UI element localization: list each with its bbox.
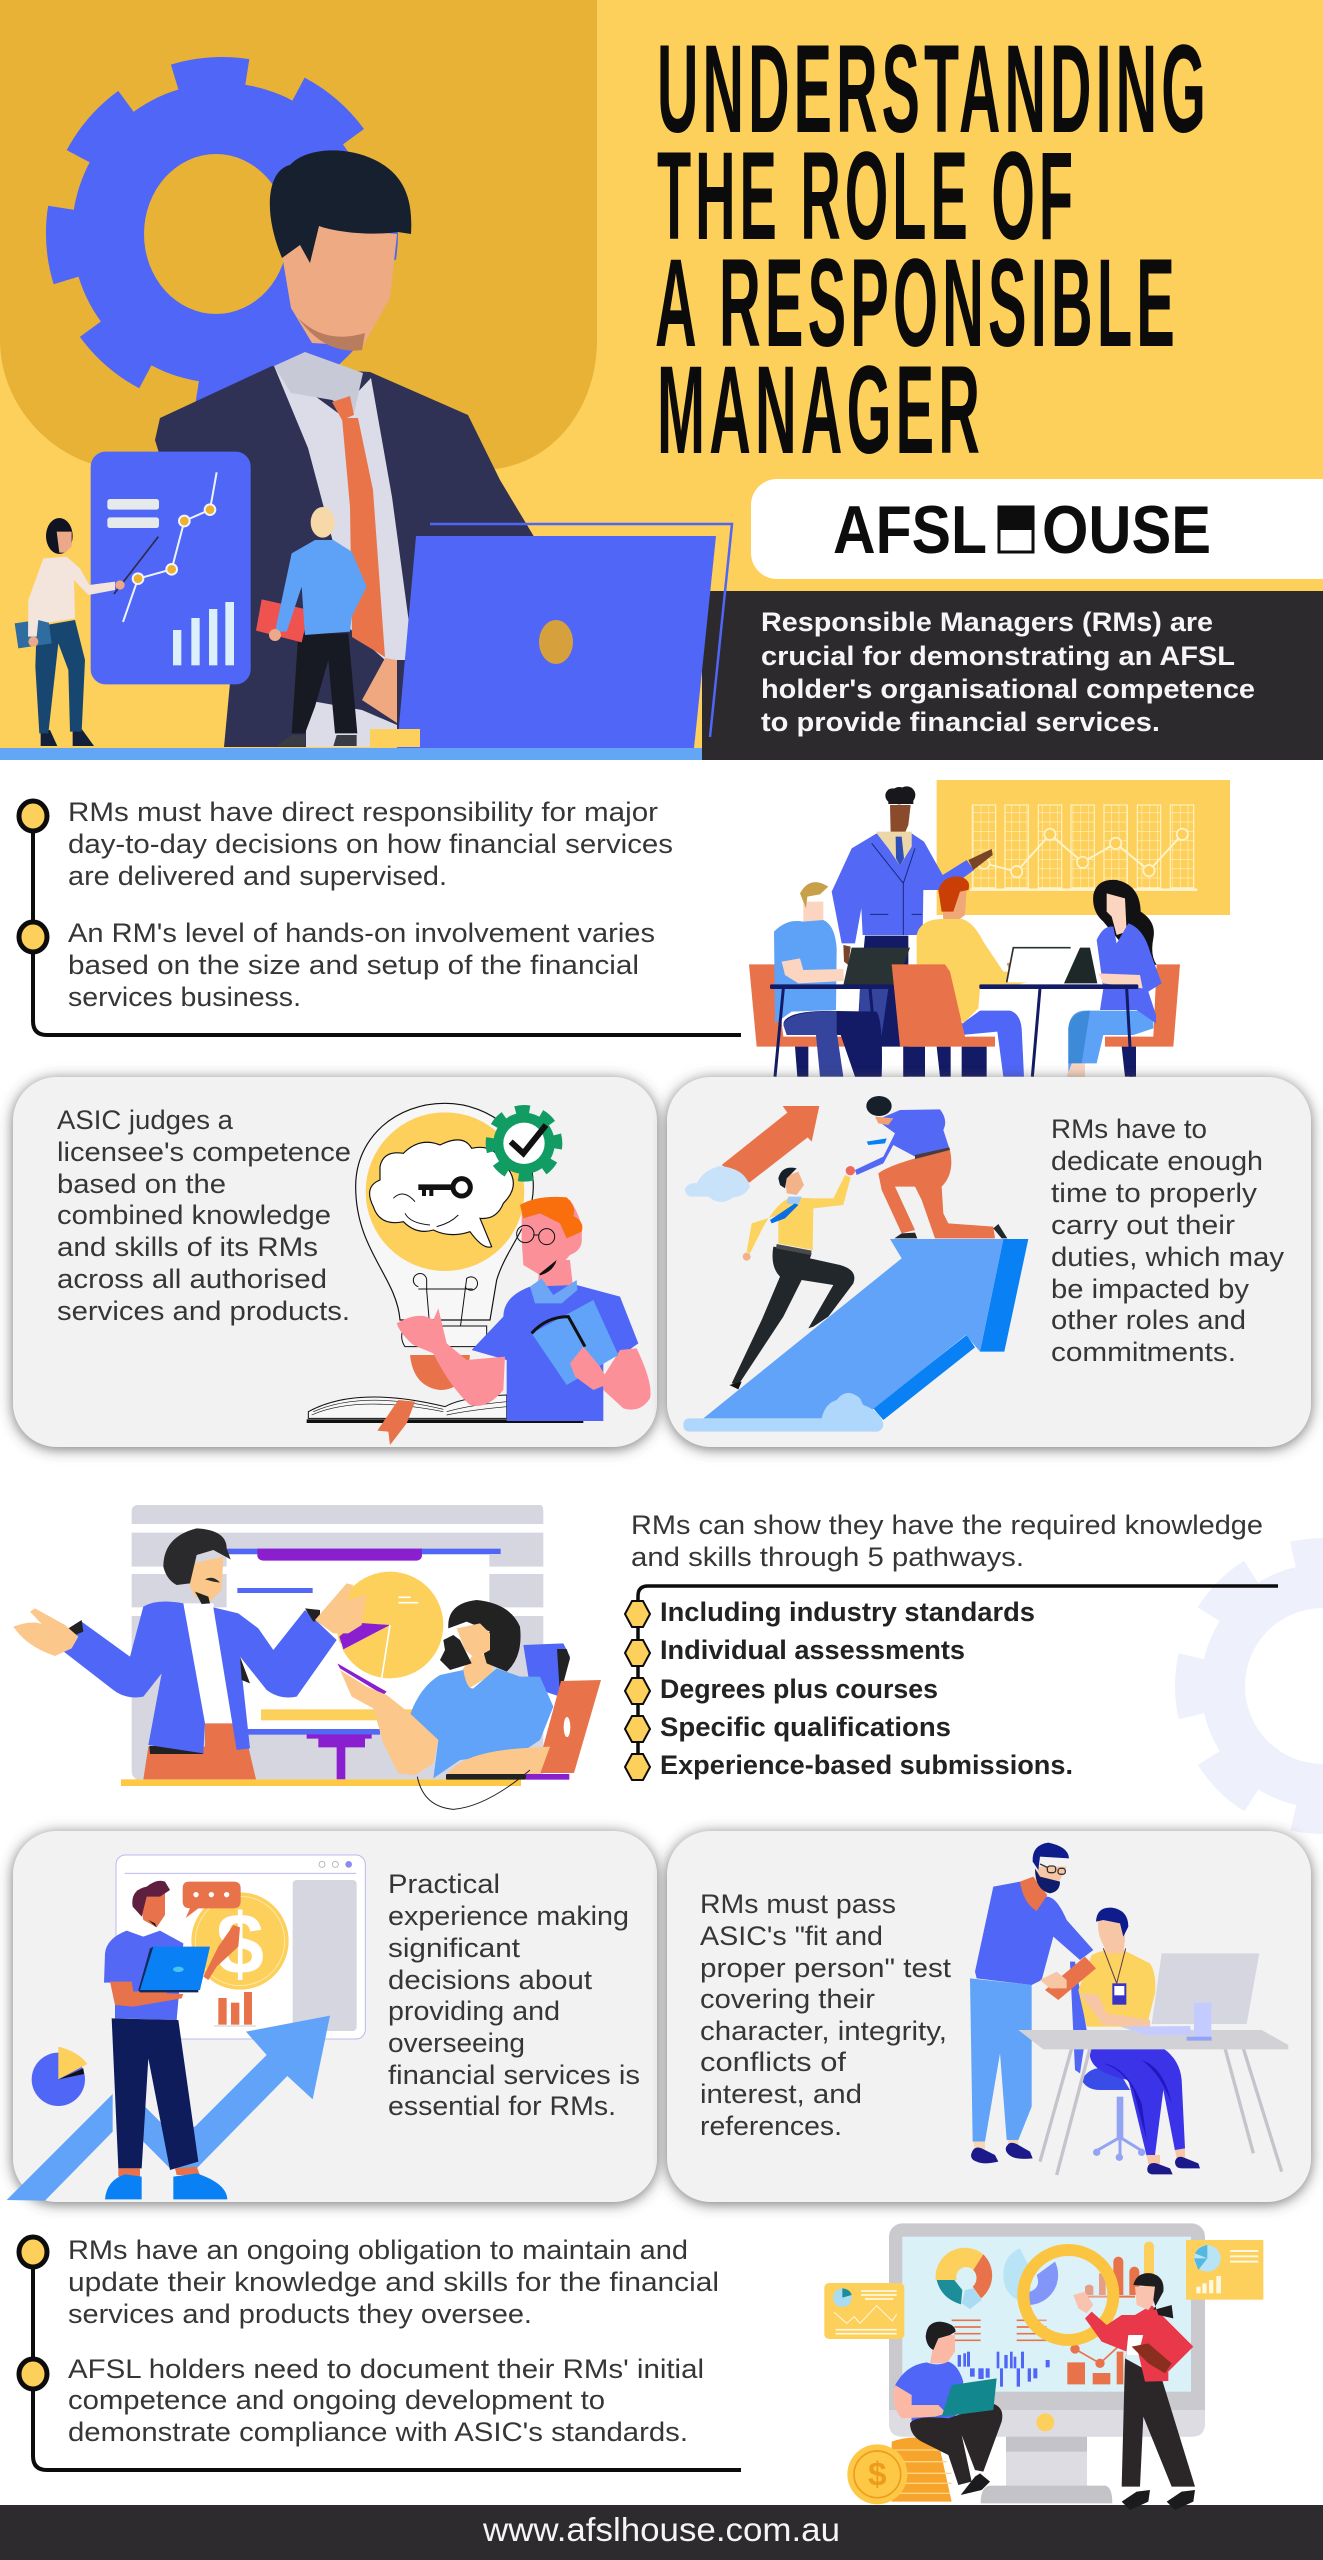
intro text: holder's organisational competence <box>761 674 1255 704</box>
timeline: last two points: update their knowledge and skills for the financial <box>68 2267 719 2297</box>
panel: dedicate time: other roles and <box>1051 1305 1246 1335</box>
pathways list: Specific qualifications <box>660 1712 951 1742</box>
desk and monitor <box>1018 1953 1288 2175</box>
angry presenter <box>13 1528 367 1779</box>
pathways list: Individual assessments <box>660 1635 965 1665</box>
blue arrow <box>7 2016 330 2201</box>
timeline: first two points <box>19 797 741 1035</box>
panel: practical experience: overseeing <box>388 2028 525 2058</box>
centre figure <box>892 876 1062 1077</box>
pathways list: Degrees plus courses <box>660 1674 938 1704</box>
panel: ASIC competence: services and products. <box>57 1296 350 1326</box>
timeline: last two points: RMs have an ongoing obligation to maintain and <box>68 2235 688 2265</box>
timeline: last two points: demonstrate compliance with ASIC's standards. <box>68 2417 688 2447</box>
reader <box>397 1197 651 1421</box>
pie <box>32 2047 87 2106</box>
timeline: last two points: services and products they oversee. <box>68 2299 532 2329</box>
panel: practical experience <box>13 1831 657 2202</box>
panel: dedicate time: be impacted by <box>1051 1274 1250 1304</box>
standing presenter <box>832 786 993 1077</box>
intro text: to provide financial services. <box>761 707 1160 737</box>
seated employee <box>1078 1908 1200 2174</box>
timeline: last two points: AFSL holders need to document their RMs' initial <box>68 2354 704 2384</box>
meeting table <box>770 984 1138 1077</box>
bottom strip <box>0 748 702 760</box>
seated man with laptop <box>893 2322 1002 2495</box>
man viewing chart <box>256 507 367 746</box>
icon: blue gear <box>6 17 438 449</box>
climber: follower <box>729 1168 854 1389</box>
panel: fit and proper person test: character, integrity, <box>700 2016 947 2046</box>
panel: dedicate time: time to properly <box>1051 1178 1258 1208</box>
illustration: mentor and employee at desk <box>970 1843 1288 2175</box>
pathways intro text <box>631 1510 1263 1572</box>
panel: ASIC competence: combined knowledge <box>57 1200 331 1230</box>
pathways list: Experience-based submissions. <box>660 1750 1073 1780</box>
chart panel and small figures <box>15 452 367 746</box>
man with tablet <box>104 1881 240 2199</box>
left chair and man <box>749 882 910 1077</box>
donut charts <box>936 2242 1154 2309</box>
pathways list: Including industry standards <box>660 1597 1035 1627</box>
header panel <box>0 0 1323 760</box>
yellow chart cards <box>824 2240 1263 2339</box>
title <box>655 20 1210 480</box>
timeline: first two points: RMs must have direct responsibility for major <box>68 797 658 827</box>
panel: ASIC competence: and skills of its RMs <box>57 1232 318 1262</box>
pale background gear <box>1162 1525 1323 1847</box>
intro text: crucial for demonstrating an AFSL <box>761 641 1235 671</box>
footer bar: www.afslhouse.com.au <box>482 2511 840 2548</box>
panel: practical experience: significant <box>388 1933 521 1963</box>
panel: ASIC competence: across all authorised <box>57 1264 327 1294</box>
panel: fit and proper person test: ASIC's "fit and <box>700 1921 883 1951</box>
illustration: team meeting <box>749 780 1230 1077</box>
panel: dedicate time <box>667 1077 1311 1447</box>
panel: fit and proper person test: proper person" test <box>700 1953 952 1983</box>
laptop <box>370 524 1323 760</box>
blue arrow <box>683 1239 1028 1432</box>
manager figure <box>155 150 536 747</box>
panel: dedicate time: RMs have to <box>1051 1114 1207 1144</box>
panel: fit and proper person test: conflicts of <box>700 2047 847 2077</box>
panel: ASIC competence: based on the <box>57 1169 226 1199</box>
data rows <box>952 2320 1047 2340</box>
pathways intro text: RMs can show they have the required knowledge <box>631 1510 1263 1540</box>
panel: practical experience: Practical <box>388 1869 500 1899</box>
coin stack <box>847 2437 952 2504</box>
logo pill: OUSE <box>1042 492 1211 568</box>
panel: practical experience: providing and <box>388 1996 560 2026</box>
logo pill <box>751 479 1323 579</box>
panel: practical experience: experience making <box>388 1901 629 1931</box>
panel: practical experience: decisions about <box>388 1965 593 1995</box>
panel: fit and proper person test: references. <box>700 2111 842 2141</box>
panel: dedicate time: commitments. <box>1051 1337 1236 1367</box>
illustration: lightbulb, brain and reader <box>307 1098 651 1445</box>
timeline: first two points: are delivered and supervised. <box>68 861 447 891</box>
intro text: Responsible Managers (RMs) are <box>761 607 1213 637</box>
panel: fit and proper person test: covering their <box>700 1984 875 2014</box>
magnifier <box>1023 2250 1143 2355</box>
timeline: last two points: competence and ongoing development to <box>68 2385 605 2415</box>
climber: helper <box>846 1096 1007 1238</box>
pathways intro text: and skills through 5 pathways. <box>631 1542 1024 1572</box>
woman presenter <box>15 518 158 746</box>
timeline: first two points: based on the size and setup of the financial <box>68 950 639 980</box>
timeline: last two points <box>19 2235 741 2470</box>
illustration: presentation <box>13 1505 601 1809</box>
panel: ASIC competence <box>13 1077 657 1447</box>
panel: practical experience: financial services is <box>388 2060 640 2090</box>
intro text <box>761 607 1255 737</box>
timeline: first two points: An RM's level of hands-on involvement varies <box>68 918 655 948</box>
logo pill: AFSL <box>833 492 987 568</box>
timeline: first two points: day-to-day decisions on how financial services <box>68 829 673 859</box>
timeline: first two points: services business. <box>68 982 301 1012</box>
coin stack: $ <box>868 2457 887 2494</box>
icon: key <box>418 1179 470 1196</box>
mentor <box>970 1843 1096 2163</box>
panel: dedicate time: carry out their <box>1051 1210 1235 1240</box>
panel: ASIC competence: licensee's competence <box>57 1137 351 1167</box>
illustration: climbing arrow <box>683 1096 1028 1432</box>
chair <box>1070 1962 1145 2161</box>
dollar coin: $ <box>216 1896 264 1992</box>
panel: dedicate time: duties, which may <box>1051 1242 1285 1272</box>
pathways list <box>625 1586 1278 1780</box>
icon: green gear check <box>478 1098 570 1189</box>
panel: ASIC competence: ASIC judges a <box>57 1105 234 1135</box>
right chair, woman and laptop <box>1007 880 1180 1077</box>
footer bar <box>0 2505 1323 2560</box>
open book <box>307 1395 583 1445</box>
woman with magnifier <box>1073 2273 1195 2510</box>
panel: practical experience: essential for RMs. <box>388 2091 616 2121</box>
seated woman <box>340 1600 601 1809</box>
illustration: monitor analytics <box>824 2223 1263 2510</box>
panel: fit and proper person test: RMs must pass <box>700 1889 896 1919</box>
panel: dedicate time: dedicate enough <box>1051 1146 1263 1176</box>
illustration: man with laptop and arrow <box>7 1855 365 2201</box>
monitor <box>889 2223 1205 2503</box>
dollar coin <box>191 1892 289 1992</box>
panel: fit and proper person test: interest, and <box>700 2079 862 2109</box>
panel: fit and proper person test <box>667 1831 1311 2202</box>
